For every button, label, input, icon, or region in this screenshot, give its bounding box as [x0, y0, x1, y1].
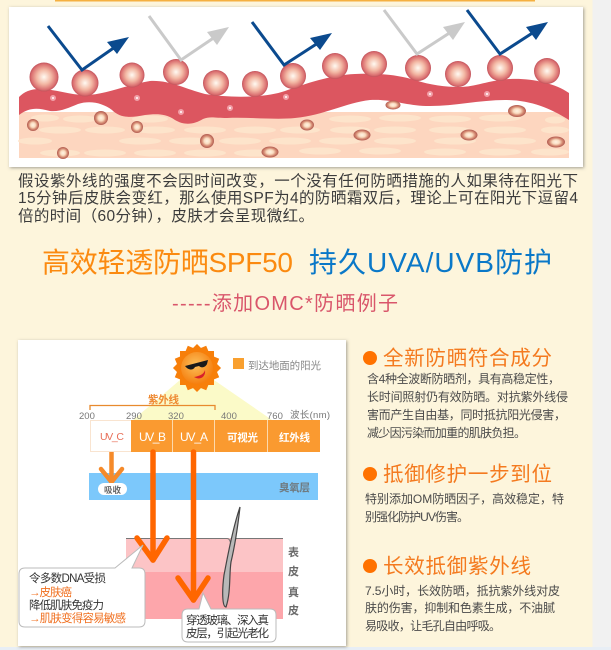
feature 2: defense and repair: [363, 463, 564, 524]
icon: sun with sunglasses: [173, 344, 221, 392]
text 1: [367, 371, 568, 440]
text 3: 肤的伤害，抑制和色素生成，不油腻: [365, 600, 555, 615]
layer labels: [288, 545, 299, 617]
layer labels: 真: [288, 585, 299, 599]
ozone layer: [89, 473, 318, 500]
panel: UV spectrum diagram: [18, 340, 346, 646]
text 1: 减少因污染而加重的肌肤负担。: [367, 425, 526, 440]
feature 1: new sunscreen ingredients: [363, 347, 568, 440]
red skin band: [19, 74, 569, 124]
text block: SPF explanation: 假设紫外线的强度不会因时间改变，一个没有任何防晒措施的人如果待在阳光下: [18, 172, 578, 190]
text 3: [365, 583, 560, 633]
skin lower layer: [19, 112, 569, 158]
heading: orange SPF50: 高效轻透防晒SPF50: [42, 247, 293, 278]
arrow: UV_C absorbed: [101, 452, 122, 483]
text 2: 别强化防护UV伤害。: [365, 509, 469, 524]
wavelength scale: 320: [168, 411, 184, 422]
cells in lower layer: [27, 100, 565, 159]
spectrum bar: [90, 420, 320, 452]
arrow: reflected UV grey 2: [384, 10, 465, 54]
wavelength scale: [79, 409, 330, 422]
callout: DNA damage: [19, 545, 145, 627]
panel: skin illustration: [9, 7, 583, 167]
hair follicle: [223, 507, 240, 607]
ozone layer: 臭氧层: [279, 481, 310, 494]
feature 3: long-lasting UV defense: [363, 555, 560, 633]
subheading: OMC: -----添加OMC*防晒例子: [172, 292, 398, 315]
callout: penetrates glass: 穿透玻璃、深入真: [186, 613, 269, 627]
wavelength scale: 波长(nm): [290, 409, 330, 421]
layer labels: 皮: [288, 564, 299, 578]
spectrum bar: UV_B: [139, 430, 166, 444]
UV bracket: 紫外线: [148, 393, 180, 406]
label: absorbed: [98, 483, 127, 495]
icon: bullet 2: [363, 467, 377, 481]
arrow: reflected UV blue 2: [252, 22, 332, 65]
spectrum bar: UV_C: [100, 431, 124, 443]
legend: sunlight reaching ground: 到达地面的阳光: [248, 359, 322, 372]
callout: DNA damage: →肌肤变得容易敏感: [29, 611, 126, 625]
text 1: 含4种全波断防晒剂，具有高稳定性，: [367, 371, 560, 386]
heading 3: 长效抵御紫外线: [383, 555, 531, 578]
icon: bullet 3: [363, 559, 377, 573]
UV bracket: [90, 393, 215, 410]
wavelength scale: 290: [126, 411, 142, 422]
layer labels: 表: [288, 545, 299, 559]
wavelength scale: 400: [221, 411, 237, 422]
text block: SPF explanation: 倍的时间（60分钟），皮肤才会呈现微红。: [18, 207, 314, 225]
label: absorbed: 吸收: [104, 485, 122, 495]
text block: SPF explanation: 15分钟后皮肤会变红，那么使用SPF为4的防晒霜双后，理论上可在阳光下逗留4: [18, 189, 578, 207]
arrow: reflected UV grey 1: [149, 16, 229, 60]
text 1: 害而产生自由基，同时抵抗阳光侵害，: [367, 407, 566, 422]
wavelength scale: 200: [79, 411, 95, 422]
arrow: reflected UV blue 3: [467, 10, 548, 54]
callout: penetrates glass: 皮层，引起光老化: [186, 626, 270, 640]
text block: SPF explanation: [18, 172, 578, 225]
skin fat cells: [18, 114, 569, 156]
spectrum bar: UV_A: [180, 430, 208, 444]
spectrum bar: 可视光: [227, 431, 258, 444]
text 3: 易吸收，让毛孔自由呼吸。: [365, 619, 501, 633]
text 3: 7.5小时，长效防晒，抵抗紫外线对皮: [365, 583, 560, 598]
sun particles: [30, 51, 560, 97]
heading 1: 全新防晒符合成分: [383, 347, 552, 370]
callout: DNA damage: 降低肌肤免疫力: [29, 598, 104, 612]
sunlight cone: [133, 380, 272, 420]
icon: bullet 1: [363, 351, 377, 365]
callout: DNA damage: 令多数DNA受损: [29, 571, 106, 585]
spectrum bar: 红外线: [279, 431, 310, 444]
arrow: UVA: [178, 452, 208, 600]
heading: blue UVA/UVB: 持久UVA/UVB防护: [309, 247, 552, 278]
heading 2: 抵御修护一步到位: [383, 463, 552, 486]
layer labels: 皮: [288, 603, 299, 617]
arrow: reflected UV blue 1: [48, 26, 129, 70]
wavelength scale: 760: [267, 411, 283, 422]
text 1: 长时间照射仍有效防晒。对抗紫外线侵: [367, 389, 568, 404]
text 2: 特别添加OM防晒因子，高效稳定，特: [365, 491, 564, 506]
callout: DNA damage: →皮肤癌: [29, 585, 72, 599]
skin layers: [126, 538, 283, 619]
arrow: UVB: [137, 452, 167, 560]
dots in red band: [51, 92, 489, 114]
callout: penetrates glass: [182, 593, 276, 642]
text 2: [365, 491, 564, 524]
